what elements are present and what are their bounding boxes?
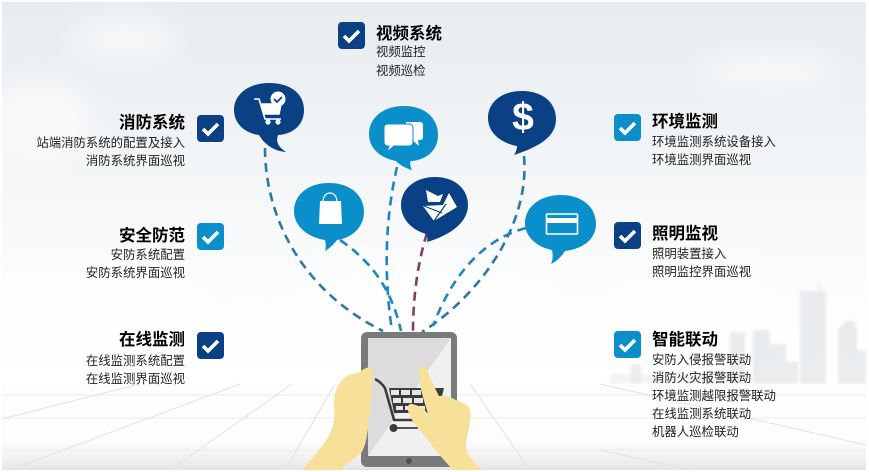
skyline	[610, 284, 866, 384]
item: 照明监视	[614, 222, 751, 279]
dashed connector: dollar bubble	[422, 156, 524, 332]
bubble: shopping cart	[234, 83, 304, 152]
item: 环境监测	[614, 111, 776, 167]
check icon	[197, 223, 224, 250]
details: 环境监测界面巡视	[652, 152, 751, 167]
tablet screen	[368, 338, 451, 456]
details: 环境监测越限报警联动	[652, 388, 776, 403]
details: 消防系统界面巡视	[86, 153, 185, 168]
details: 安防系统界面巡视	[86, 265, 185, 280]
heading: 在线监测	[119, 330, 185, 349]
details: 在线监测界面巡视	[86, 371, 185, 386]
bubble: envelope	[401, 177, 468, 242]
item: 在线监测	[86, 330, 224, 386]
home button	[406, 458, 412, 464]
check icon	[614, 331, 641, 358]
details: 视频监控	[376, 45, 426, 59]
bubble: credit card	[525, 195, 596, 264]
bubble: dollar	[488, 91, 556, 155]
details: 在线监测系统配置	[86, 354, 185, 368]
bubble: dollar: $	[512, 96, 534, 139]
right hand	[408, 366, 481, 470]
details: 环境监测系统设备接入	[652, 135, 776, 149]
item: 安全防范	[86, 223, 224, 280]
heading: 消防系统	[119, 112, 186, 132]
heading: 视频系统	[376, 23, 442, 43]
tablet body	[361, 332, 457, 467]
details: 机器人巡检联动	[652, 424, 739, 439]
heading: 环境监测	[652, 111, 718, 131]
details: 安防入侵报警联动	[652, 353, 751, 367]
bubble: chat	[369, 106, 438, 170]
dashed connector: envelope bubble	[413, 233, 427, 332]
dashed connector: chat bubble	[387, 167, 397, 331]
dashed connector: cart bubble	[265, 148, 383, 331]
details: 消防火灾报警联动	[652, 370, 751, 385]
heading: 安全防范	[119, 225, 186, 245]
check icon	[338, 22, 365, 49]
check icon	[197, 115, 224, 142]
check icon	[614, 114, 641, 141]
dashed connector: bag bubble	[340, 240, 401, 331]
item: 视频系统	[338, 22, 442, 78]
dashed connector: card bubble	[433, 228, 526, 326]
item: 智能联动	[614, 329, 776, 439]
details: 站端消防系统的配置及接入	[36, 136, 185, 150]
item: 消防系统	[36, 112, 224, 168]
details: 照明装置接入	[652, 247, 726, 261]
shopping cart icon	[375, 379, 444, 432]
heading: 照明监视	[652, 224, 718, 243]
details: 照明监控界面巡视	[652, 264, 751, 279]
tablet with hands	[303, 332, 481, 470]
details: 在线监测系统联动	[652, 407, 751, 421]
bubble: shopping bag	[294, 183, 364, 251]
left hand	[303, 368, 373, 470]
heading: 智能联动	[652, 329, 718, 349]
details: 视频巡检	[376, 63, 426, 78]
details: 安防系统配置	[111, 248, 185, 262]
check icon	[197, 332, 224, 359]
check icon	[614, 222, 641, 249]
